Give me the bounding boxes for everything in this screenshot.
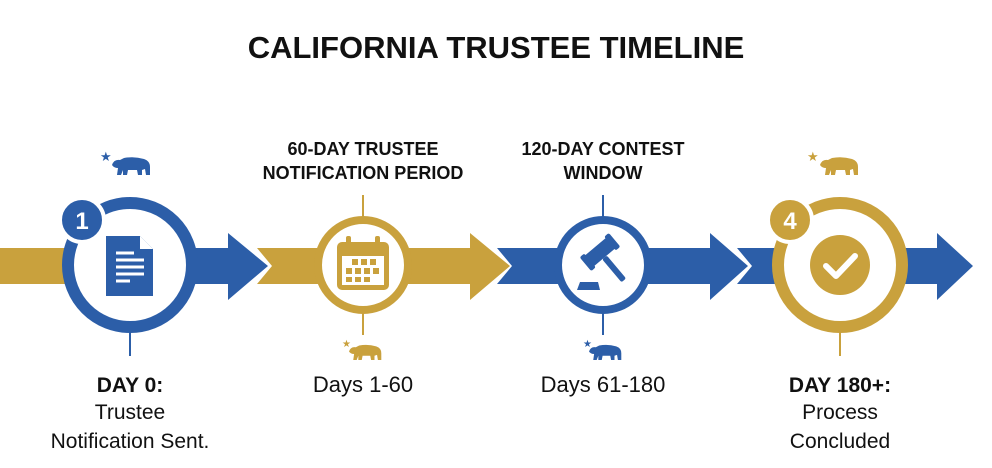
step 1: Day 0 xyxy=(60,149,192,356)
label 1: Trustee xyxy=(95,401,165,424)
badge 4: 4 xyxy=(783,208,797,235)
label 2: Days 1-60 xyxy=(313,372,413,397)
arrow: segment 1 blue xyxy=(130,233,268,300)
label 3: Days 61-180 xyxy=(541,372,665,397)
label 1: Notification Sent. xyxy=(51,430,209,453)
arrow: segment 4 blue xyxy=(737,233,973,300)
badge 4 xyxy=(768,198,812,242)
step 2: 60-day: NOTIFICATION PERIOD xyxy=(263,163,463,183)
arrow: segment 1 gold lead-in xyxy=(0,248,70,284)
icon: bear 4: ★ xyxy=(807,149,819,164)
icon: bear 4 xyxy=(807,149,858,175)
label 4: DAY 180+: xyxy=(789,374,891,397)
label 1: DAY 0: xyxy=(97,374,163,397)
icon: document xyxy=(106,236,153,296)
arrow: segment 3 blue xyxy=(497,233,748,300)
step 3: 120-day: WINDOW xyxy=(564,163,642,183)
badge 1: 1 xyxy=(75,208,89,235)
step 4: Day 180+ xyxy=(768,149,902,356)
label 4: Process xyxy=(802,401,878,424)
icon: calendar xyxy=(337,236,389,290)
step 2: 60-day xyxy=(263,139,463,397)
heading 3: 120-DAY CONTEST xyxy=(521,139,685,159)
label 4: Concluded xyxy=(790,430,890,453)
icon: bear 1 xyxy=(100,149,150,175)
icon: gavel xyxy=(577,233,638,293)
icon: bear 2: ★ xyxy=(342,339,351,350)
arrow: segment 2 gold xyxy=(257,233,510,300)
badge 1 xyxy=(60,198,104,242)
icon: bear 2 xyxy=(342,339,381,360)
icon: bear 3 xyxy=(583,339,621,360)
icon: bear 1: ★ xyxy=(100,149,112,164)
icon: check xyxy=(810,235,870,295)
heading 2: 60-DAY TRUSTEE xyxy=(287,139,439,159)
title: CALIFORNIA TRUSTEE TIMELINE xyxy=(248,30,744,65)
icon: bear 3: ★ xyxy=(583,339,592,350)
step 3: 120-day xyxy=(521,139,685,397)
